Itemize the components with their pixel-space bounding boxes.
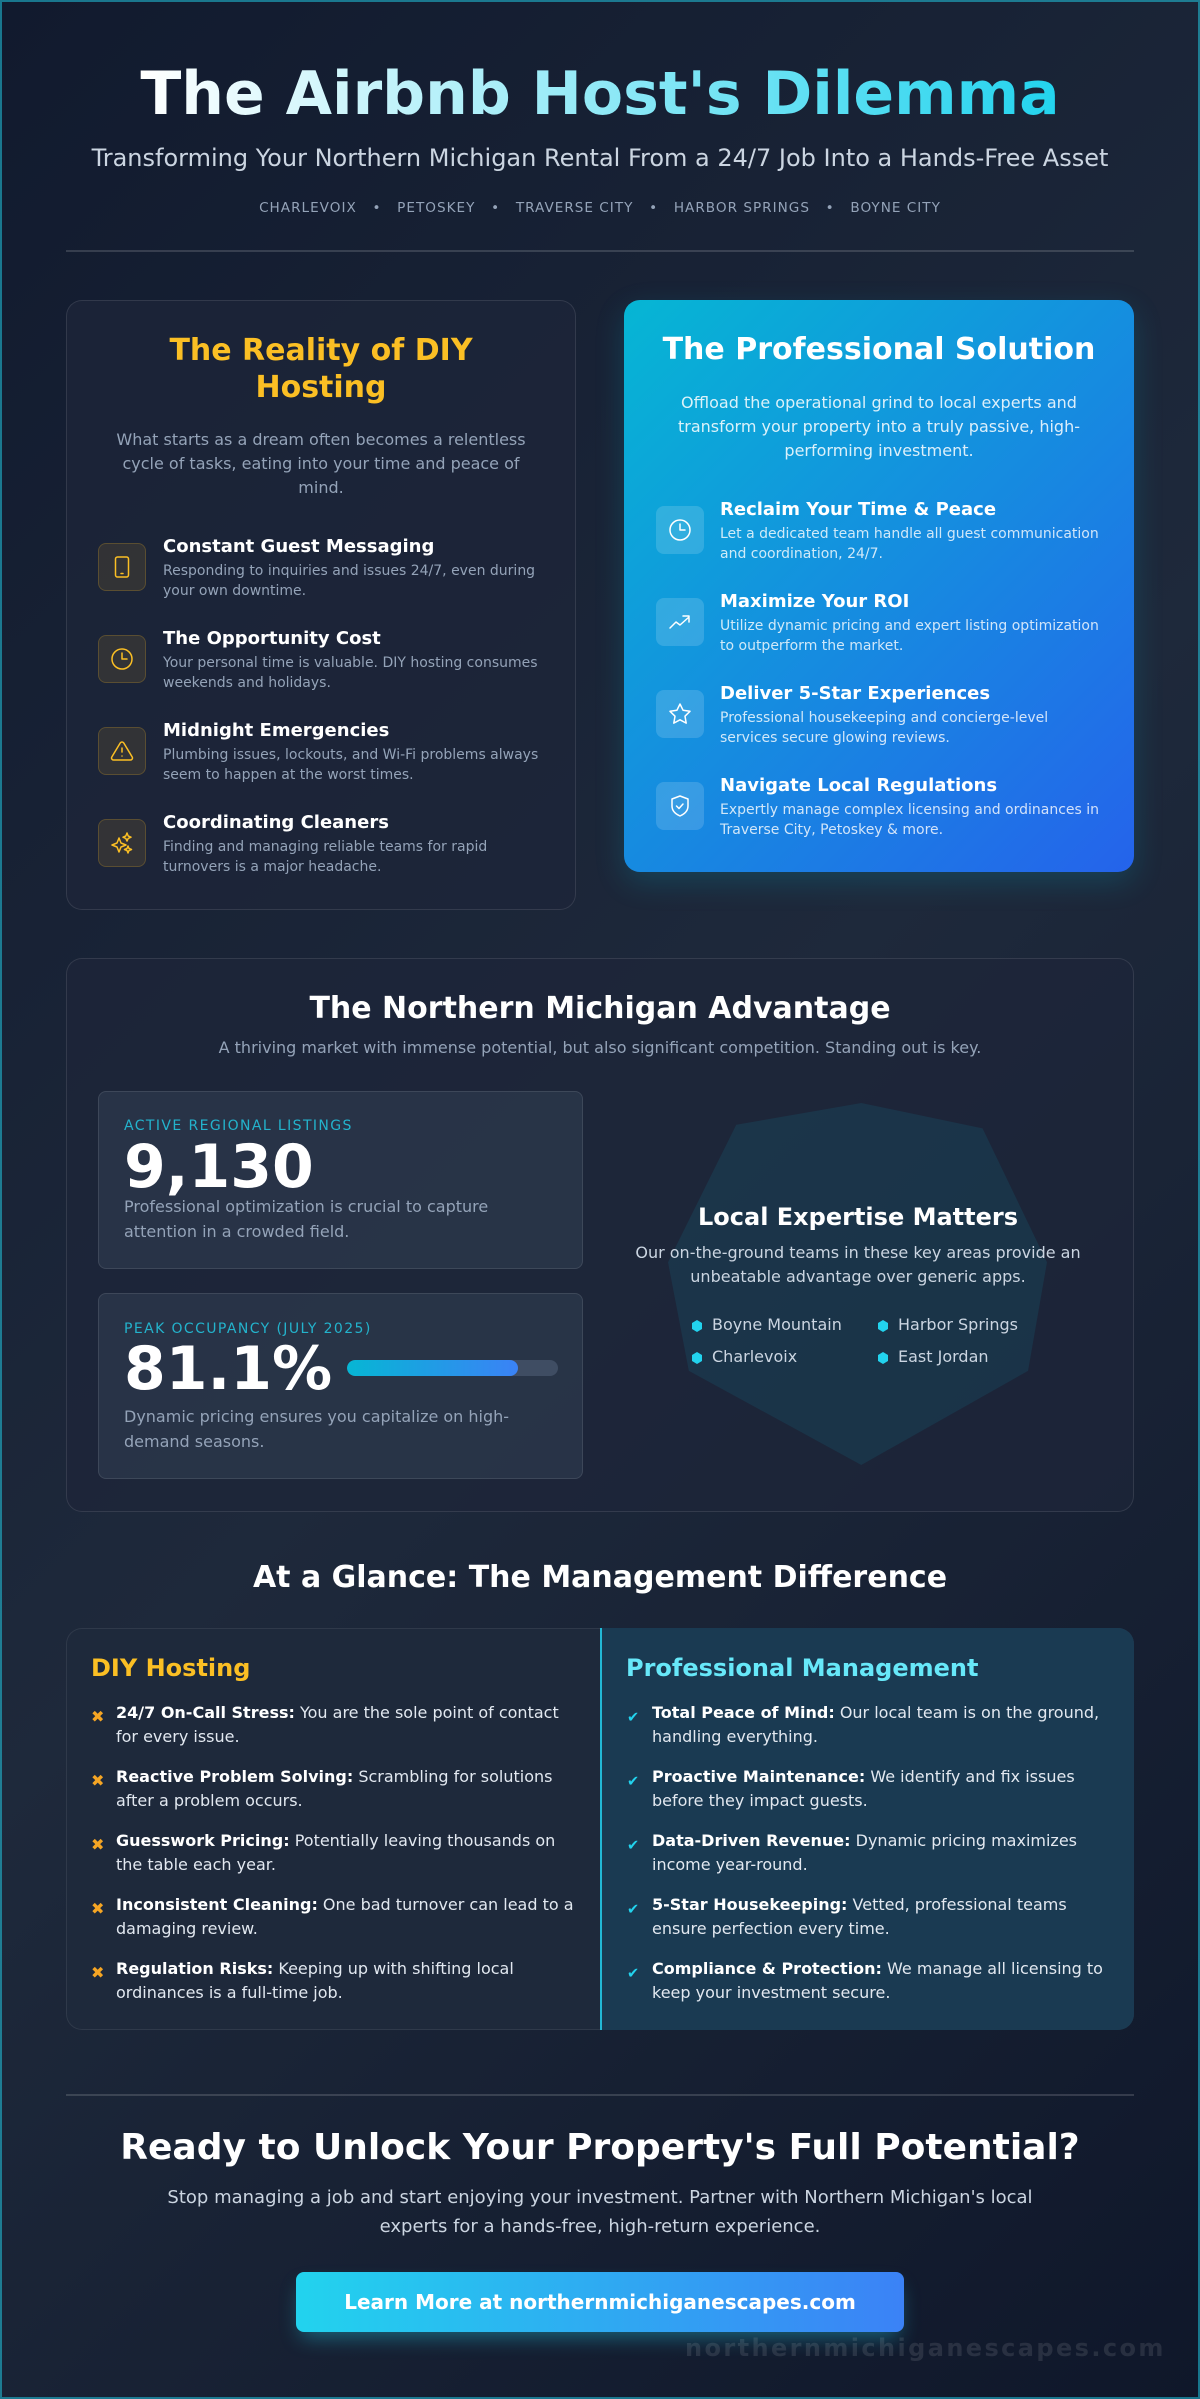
call to action heading: Ready to Unlock Your Property's Full Potential? — [120, 2127, 1080, 2168]
icon: trending up — [656, 598, 704, 646]
item: deliver 5-star experiences: services secure glowing reviews. — [720, 730, 950, 746]
column: professional management: ✔ — [627, 1838, 639, 1854]
item: maximize your ROI: Utilize dynamic pricing and expert listing optimization — [720, 618, 1099, 634]
item: coordinating cleaners — [98, 812, 487, 875]
call to action text — [167, 2187, 1033, 2237]
column: professional management — [600, 1628, 1134, 2030]
item: reclaim your time: and coordination, 24/7. — [720, 546, 883, 562]
column: professional management: before they impact guests. — [652, 1791, 868, 1810]
call to action text: Stop managing a job and start enjoying your investment. Partner with Northern Michigan's local — [167, 2187, 1033, 2208]
column: DIY hosting: ✖ — [91, 1771, 104, 1790]
column: professional management: Professional Management — [626, 1654, 978, 1682]
icon: phone — [98, 543, 146, 591]
local expertise shape — [668, 1103, 1047, 1465]
column: DIY hosting: damaging review. — [116, 1919, 258, 1938]
intro text — [678, 393, 1080, 460]
item: navigate local regulations — [656, 775, 1099, 838]
column: DIY hosting: DIY Hosting — [91, 1654, 250, 1682]
item: maximize your ROI — [656, 591, 1099, 654]
stat number: 81.1% — [124, 1334, 332, 1404]
column: professional management: ✔ — [627, 1902, 639, 1918]
local expertise heading: Local Expertise Matters — [698, 1203, 1018, 1231]
icon: shield check — [656, 782, 704, 830]
column: DIY hosting: Guesswork Pricing: Potentially leaving thousands on — [116, 1831, 555, 1850]
column: professional management: Proactive Maintenance: We identify and fix issues — [652, 1767, 1075, 1786]
panel heading: Hosting — [255, 370, 387, 405]
column: DIY hosting: for every issue. — [116, 1727, 240, 1746]
item: midnight emergencies: seem to happen at the worst times. — [163, 767, 414, 783]
panel heading: The Professional Solution — [663, 332, 1095, 367]
intro text: transform your property into a truly passive, high- — [678, 417, 1080, 436]
panel heading — [169, 333, 473, 405]
watermark: northernmichiganescapes.com — [685, 2334, 1166, 2362]
location tags: Boyne Mountain — [712, 1315, 842, 1334]
column: professional management: ensure perfection every time. — [652, 1919, 890, 1938]
local expertise text: Our on-the-ground teams in these key areas provide an — [635, 1243, 1081, 1262]
column: DIY hosting — [91, 1654, 574, 2002]
item: midnight emergencies — [98, 720, 538, 783]
column: professional management: ✔ — [627, 1710, 639, 1726]
item: midnight emergencies: Plumbing issues, lockouts, and Wi-Fi problems always — [163, 747, 538, 763]
item: the opportunity cost: Your personal time is valuable. DIY hosting consumes — [163, 655, 538, 671]
item: deliver 5-star experiences — [656, 683, 1048, 746]
local expertise text: unbeatable advantage over generic apps. — [690, 1267, 1026, 1286]
location list: CHARLEVOIX • PETOSKEY • TRAVERSE CITY • HARBOR SPRINGS • BOYNE CITY — [259, 200, 941, 216]
column: professional management: income year-round. — [652, 1855, 808, 1874]
column: DIY hosting: after a problem occurs. — [116, 1791, 303, 1810]
title: The Airbnb Host's Dilemma — [140, 59, 1060, 129]
stat card: peak occupancy: demand seasons. — [124, 1432, 264, 1450]
icon: warning triangle — [98, 727, 146, 775]
item: the opportunity cost: weekends and holidays. — [163, 675, 331, 691]
column: DIY hosting: ordinances is a full-time job. — [116, 1983, 343, 2002]
column: DIY hosting: Regulation Risks: Keeping up with shifting local — [116, 1959, 514, 1978]
item: navigate local regulations: Navigate Local Regulations — [720, 775, 997, 796]
column: professional management: Data-Driven Revenue: Dynamic pricing maximizes — [652, 1831, 1077, 1850]
item: navigate local regulations: Traverse City, Petoskey & more. — [720, 822, 943, 838]
intro text: Offload the operational grind to local experts and — [681, 393, 1077, 412]
panel: northern michigan advantage — [66, 958, 1134, 1512]
subtitle: Transforming Your Northern Michigan Rental From a 24/7 Job Into a Hands-Free Asset — [92, 144, 1108, 172]
call to action text: experts for a hands-free, high-return experience. — [380, 2216, 820, 2237]
item: deliver 5-star experiences: Deliver 5-Star Experiences — [720, 683, 990, 704]
item: coordinating cleaners: Coordinating Cleaners — [163, 812, 389, 833]
stat number: 9,130 — [124, 1132, 314, 1202]
column: professional management: Compliance & Protection: We manage all licensing to — [652, 1959, 1103, 1978]
icon: clock — [656, 506, 704, 554]
column: professional management: handling everything. — [652, 1727, 818, 1746]
item: maximize your ROI: Maximize Your ROI — [720, 591, 909, 612]
column: professional management: keep your investment secure. — [652, 1983, 890, 2002]
section subtitle: A thriving market with immense potential, but also significant competition. Standing out is key. — [219, 1038, 981, 1057]
column: DIY hosting: ✖ — [91, 1963, 104, 1982]
intro text: mind. — [298, 478, 344, 497]
item: reclaim your time: Let a dedicated team handle all guest communication — [720, 526, 1099, 542]
progress bar — [347, 1360, 558, 1376]
item: coordinating cleaners: Finding and managing reliable teams for rapid — [163, 839, 487, 855]
stat card: active listings: Professional optimization is crucial to capture — [124, 1197, 488, 1216]
item: reclaim your time: Reclaim Your Time & Peace — [720, 499, 996, 520]
stat card: peak occupancy — [98, 1293, 583, 1479]
icon: clock — [98, 635, 146, 683]
column: DIY hosting: ✖ — [91, 1835, 104, 1854]
column: professional management: ✔ — [627, 1774, 639, 1790]
call to action button — [296, 2272, 904, 2332]
comparison heading: At a Glance: The Management Difference — [253, 1560, 947, 1595]
item: coordinating cleaners: turnovers is a major headache. — [163, 859, 381, 875]
stat card: active listings: ACTIVE REGIONAL LISTINGS — [124, 1118, 353, 1134]
column: DIY hosting: the table each year. — [116, 1855, 276, 1874]
icon: star — [656, 690, 704, 738]
item: constant guest messaging: Responding to inquiries and issues 24/7, even during — [163, 563, 535, 579]
column: DIY hosting: 24/7 On-Call Stress: You are the sole point of contact — [116, 1703, 559, 1722]
stat card: peak occupancy: PEAK OCCUPANCY (JULY 2025) — [124, 1321, 372, 1337]
location tags: Charlevoix — [712, 1347, 797, 1366]
item: constant guest messaging — [98, 536, 535, 599]
column: DIY hosting: Reactive Problem Solving: Scrambling for solutions — [116, 1767, 552, 1786]
item: the opportunity cost: The Opportunity Cost — [163, 628, 381, 649]
item: maximize your ROI: to outperform the market. — [720, 638, 903, 654]
stat card: active listings — [98, 1091, 583, 1269]
stat card: active listings: attention in a crowded field. — [124, 1222, 349, 1240]
column: DIY hosting: ✖ — [91, 1899, 104, 1918]
panel heading: The Reality of DIY — [169, 333, 473, 368]
panel: the reality of DIY hosting — [66, 300, 576, 910]
section heading: The Northern Michigan Advantage — [309, 991, 891, 1026]
column: professional management: 5-Star Housekeeping: Vetted, professional teams — [652, 1895, 1067, 1914]
item: deliver 5-star experiences: Professional housekeeping and concierge-level — [720, 710, 1048, 726]
item: constant guest messaging: your own downtime. — [163, 583, 306, 599]
item: midnight emergencies: Midnight Emergencies — [163, 720, 389, 741]
intro text: performing investment. — [784, 441, 974, 460]
column: DIY hosting: Inconsistent Cleaning: One bad turnover can lead to a — [116, 1895, 574, 1914]
item: reclaim your time — [656, 499, 1099, 562]
local expertise text — [635, 1243, 1081, 1286]
location tags — [692, 1315, 1018, 1366]
icon: sparkles — [98, 819, 146, 867]
item: navigate local regulations: Expertly manage complex licensing and ordinances in — [720, 802, 1099, 818]
item: the opportunity cost — [98, 628, 538, 691]
column: professional management: ✔ — [627, 1966, 639, 1982]
location tags: Harbor Springs — [898, 1315, 1018, 1334]
intro text: What starts as a dream often becomes a relentless — [116, 430, 526, 449]
column: professional management: Total Peace of Mind: Our local team is on the ground, — [652, 1703, 1099, 1722]
intro text — [116, 430, 526, 497]
comparison table — [66, 1628, 1134, 2030]
item: constant guest messaging: Constant Guest Messaging — [163, 536, 434, 557]
panel: the professional solution — [624, 300, 1134, 872]
location tags: East Jordan — [898, 1347, 989, 1366]
column: DIY hosting: ✖ — [91, 1707, 104, 1726]
stat card: peak occupancy: Dynamic pricing ensures you capitalize on high- — [124, 1407, 509, 1426]
call to action button: Learn More at northernmichiganescapes.com — [344, 2290, 856, 2314]
intro text: cycle of tasks, eating into your time and peace of — [122, 454, 520, 473]
